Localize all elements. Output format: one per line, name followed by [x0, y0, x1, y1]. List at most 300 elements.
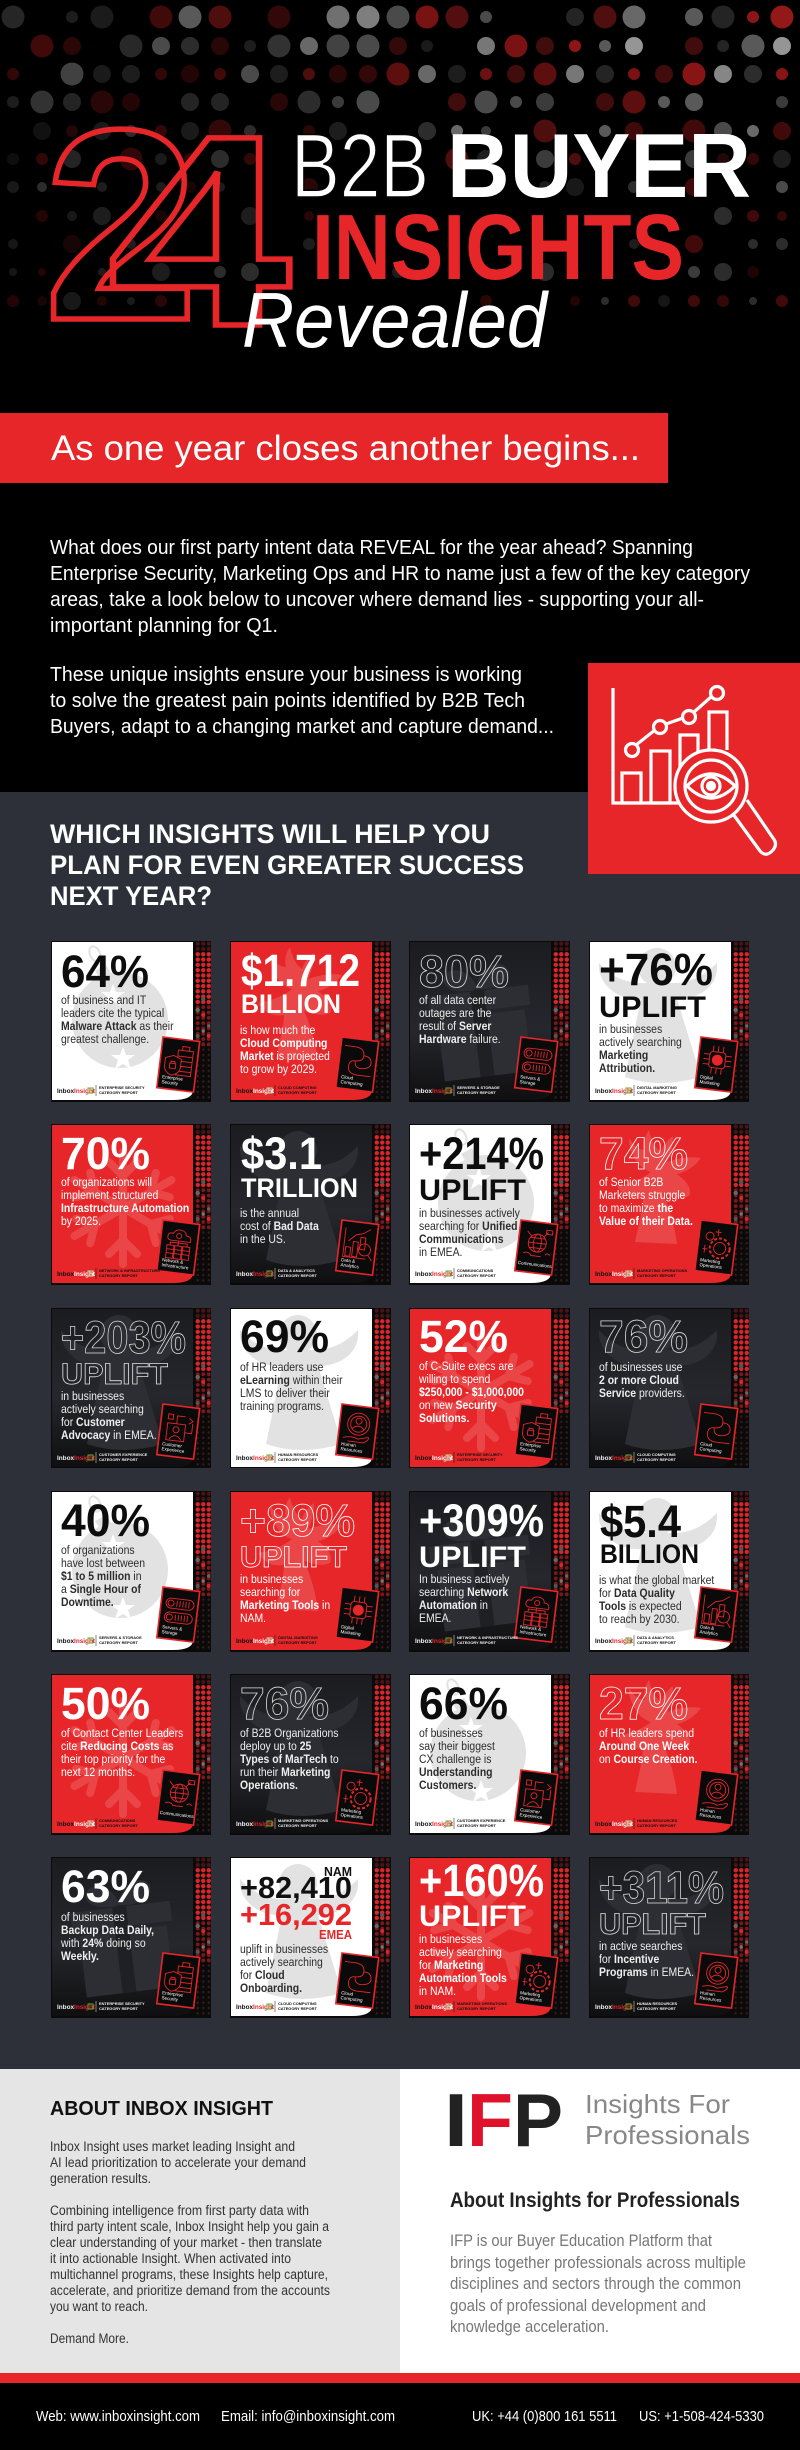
- body text: Downtime.: [61, 1596, 114, 1609]
- body text: Service: [599, 1387, 636, 1400]
- logo and category: CATEGORY REPORT: [99, 2006, 138, 2011]
- report cover: [515, 1770, 558, 1825]
- IFP logo: Insights For: [585, 2089, 730, 2119]
- logo and category: COMMUNICATIONS: [99, 1818, 136, 1823]
- report cover: Enterprise: [162, 1990, 184, 1998]
- body text: implement structured: [61, 1189, 158, 1202]
- logo and category: InboxInsight: [57, 1638, 96, 1645]
- body text: Infrastructure Automation: [61, 1202, 189, 1215]
- body text: Market: [240, 1050, 274, 1063]
- IFP text: goals of professional development and: [450, 2296, 706, 2315]
- logo and category: CATEGORY REPORT: [637, 1273, 676, 1278]
- report cover: [157, 1770, 200, 1825]
- IFP text: disciplines and sectors through the common: [450, 2274, 741, 2293]
- statistic: [241, 945, 360, 1019]
- statistic: BILLION: [600, 1539, 699, 1569]
- statistic: 69%: [240, 1311, 329, 1362]
- body text: on new: [419, 1399, 456, 1412]
- report cover: Resources: [699, 1812, 722, 1820]
- body text: In business actively: [419, 1573, 510, 1586]
- logo and category: CLOUD COMPUTING: [278, 2001, 317, 2006]
- watermark: bauble: [438, 1128, 534, 1252]
- statistic: [599, 944, 713, 1024]
- body text: in businesses actively: [419, 1207, 520, 1220]
- logo and category: [415, 1818, 506, 1829]
- report cover: Data &: [700, 1624, 714, 1631]
- logo and category: CATEGORY REPORT: [278, 1457, 317, 1462]
- logo and category: [595, 1268, 687, 1279]
- report cover: Infrastructure: [161, 1262, 189, 1270]
- report cover: Computing: [340, 1995, 363, 2003]
- body text: failure.: [467, 1033, 501, 1046]
- title numeral 24 outlined: 4: [108, 79, 293, 383]
- logo and category: [57, 1818, 138, 1829]
- intro text: [50, 537, 750, 738]
- body text: in businesses: [240, 1573, 303, 1586]
- body text: deploy up to: [240, 1740, 300, 1753]
- title: Revealed: [242, 276, 549, 364]
- body text: Programs: [599, 1966, 648, 1979]
- logo and category: COMMUNICATIONS: [457, 1268, 494, 1273]
- logo and category: CATEGORY REPORT: [457, 1273, 496, 1278]
- logo and category: InboxInsight: [57, 1088, 96, 1095]
- watermark: angel: [599, 1864, 717, 1999]
- body text: Security: [456, 1399, 497, 1412]
- report cover: Customer: [162, 1441, 183, 1449]
- logo and category: [57, 1635, 142, 1646]
- report cover: Customer: [520, 1807, 541, 1815]
- body text: for: [599, 1953, 614, 1966]
- report cover: Storage: [519, 1079, 536, 1086]
- stat card: +309% uplift network automation: [409, 1491, 570, 1652]
- body text: their top priority for the: [61, 1753, 165, 1766]
- IFP logo: [444, 2078, 750, 2162]
- report cover: [515, 1037, 558, 1092]
- logo and category: MARKETING OPERATIONS: [278, 1818, 328, 1823]
- stat card: +311% uplift incentive programs: [589, 1857, 749, 2018]
- body text: searching for: [240, 1586, 300, 1599]
- body text: leaders cite the typical: [61, 1007, 164, 1020]
- statistic: 70%: [61, 1128, 150, 1179]
- report cover: [336, 1770, 379, 1825]
- watermark: angel: [240, 1864, 358, 1999]
- report cover: Experience: [519, 1812, 543, 1820]
- report cover: Analytics: [699, 1629, 719, 1636]
- report cover: [336, 1953, 379, 2008]
- logo and category: CATEGORY REPORT: [637, 2006, 676, 2011]
- IFP logo: P: [513, 2078, 563, 2162]
- about text: Demand More.: [50, 2331, 129, 2346]
- about text: generation results.: [50, 2171, 151, 2186]
- title: [44, 73, 751, 383]
- body text: in: [131, 1570, 142, 1583]
- statistic: [61, 1312, 186, 1391]
- report cover: Marketing: [341, 1807, 362, 1815]
- body text: for: [599, 1587, 614, 1600]
- watermark: angel: [240, 1315, 358, 1450]
- body text: Around One Week: [599, 1740, 690, 1753]
- statistic: UPLIFT: [419, 1174, 526, 1207]
- body text: Customer: [76, 1416, 125, 1429]
- logo and category: SERVERS & STORAGE: [99, 1635, 142, 1640]
- body text: Solutions.: [419, 1412, 469, 1425]
- IFP text: IFP is our Buyer Education Platform that: [450, 2231, 712, 2250]
- report cover: Operations: [699, 1262, 723, 1270]
- logo and category: InboxInsight: [57, 2004, 96, 2011]
- heading: about IFP: About Insights for Professionals: [450, 2189, 740, 2212]
- body text: outages are the: [419, 1007, 491, 1020]
- logo and category: InboxInsight: [595, 1271, 634, 1278]
- statistic: +203%: [61, 1312, 186, 1363]
- logo and category: CLOUD COMPUTING: [278, 1085, 317, 1090]
- statistic: [419, 1495, 544, 1574]
- body text: CX challenge is: [419, 1753, 492, 1766]
- intro text: These unique insights ensure your business is working: [50, 664, 522, 686]
- body text: is how much the: [240, 1024, 315, 1037]
- report cover: [695, 1220, 738, 1275]
- report cover: Enterprise: [162, 1074, 184, 1082]
- title numeral 24 outlined: 2: [44, 73, 198, 377]
- background: slate insights section: [0, 792, 800, 2069]
- stat card: 63% backup data: [51, 1857, 211, 2018]
- logo and category: [236, 1452, 319, 1463]
- statistic: 50%: [61, 1678, 150, 1729]
- watermark: angel: [240, 1131, 358, 1266]
- body text: eLearning: [240, 1374, 290, 1387]
- report cover: Storage: [161, 1629, 178, 1636]
- background: black header: [0, 0, 800, 792]
- body text: in: [319, 1599, 330, 1612]
- body text: Marketing: [281, 1766, 330, 1779]
- watermark: angel: [599, 948, 717, 1083]
- logo and category: [415, 1635, 518, 1646]
- statistic: UPLIFT: [599, 991, 706, 1024]
- logo and category: InboxInsight: [57, 1271, 96, 1278]
- body text: of businesses use: [599, 1361, 682, 1374]
- logo and category: [595, 1818, 678, 1829]
- body text: of C-Suite execs are: [419, 1360, 513, 1373]
- body text: Cloud: [255, 1969, 285, 1982]
- stat card: +76% uplift marketing attribution: [589, 941, 749, 1102]
- logo and category: InboxInsight: [595, 1088, 634, 1095]
- body text: 24% doing so: [82, 1937, 146, 1950]
- logo and category: CATEGORY REPORT: [637, 1457, 676, 1462]
- body text: Backup Data Daily,: [61, 1924, 154, 1937]
- report cover: Marketing: [340, 1629, 361, 1637]
- intro text: What does our first party intent data REVEAL for the year ahead? Spanning: [50, 537, 693, 559]
- IFP logo: Professionals: [585, 2120, 750, 2150]
- report cover: Resources: [699, 1995, 722, 2003]
- statistic: EMEA: [319, 1927, 353, 1942]
- logo and category: [415, 1085, 500, 1096]
- logo and category: CATEGORY REPORT: [457, 2006, 496, 2011]
- report cover: [515, 1953, 558, 2008]
- watermark: snowflake: [426, 1336, 536, 1448]
- logo and category: [595, 2001, 678, 2012]
- logo and category: [415, 2001, 507, 2012]
- report cover: Cloud: [341, 1990, 354, 1997]
- watermark: reindeer: [617, 1680, 701, 1794]
- report cover: [157, 1404, 200, 1459]
- body text: 25: [300, 1740, 311, 1753]
- watermark: snowflake: [68, 1702, 178, 1814]
- logo and category: [57, 1085, 145, 1096]
- logo and category: CATEGORY REPORT: [457, 1457, 496, 1462]
- body text: Understanding: [419, 1766, 493, 1779]
- statistic: UPLIFT: [599, 1908, 706, 1941]
- body text: for: [419, 1959, 434, 1972]
- report cover: Computing: [340, 1079, 363, 1087]
- logo and category: InboxInsight: [57, 1821, 96, 1828]
- logo and category: InboxInsight: [415, 1455, 454, 1462]
- footer bar: UK: +44 (0)800 161 5511: [472, 2408, 617, 2425]
- body text: next 12 months.: [61, 1766, 135, 1779]
- body text: $250,000 - $1,000,000: [419, 1386, 524, 1399]
- intro text: Buyers, adapt to a changing market and capture demand...: [50, 716, 554, 738]
- report cover: Cloud: [700, 1441, 713, 1448]
- body text: of HR leaders spend: [599, 1727, 694, 1740]
- stat card: 27% course creation: [589, 1674, 749, 1835]
- logo and category: [236, 1818, 328, 1829]
- logo and category: InboxInsight: [595, 1821, 634, 1828]
- about text: Inbox Insight uses market leading Insight and: [50, 2139, 295, 2154]
- report cover: Digital: [700, 1074, 713, 1081]
- body text: with: [60, 1937, 82, 1950]
- statistic: +76%: [599, 944, 713, 995]
- logo and category: [236, 1268, 317, 1279]
- logo and category: CATEGORY REPORT: [637, 1823, 676, 1828]
- report cover: Security: [161, 1079, 179, 1086]
- report cover: [336, 1587, 379, 1642]
- logo and category: CATEGORY REPORT: [99, 1823, 138, 1828]
- logo and category: InboxInsight: [236, 1455, 275, 1462]
- logo and category: [236, 1635, 318, 1646]
- report cover: Marketing: [520, 1990, 541, 1998]
- logo and category: HUMAN RESOURCES: [278, 1452, 319, 1457]
- statistic: +82,410: [240, 1870, 352, 1905]
- report cover: Computing: [699, 1446, 722, 1454]
- statistic: [240, 1864, 353, 1942]
- logo and category: [415, 1268, 496, 1279]
- logo and category: CATEGORY REPORT: [637, 1090, 676, 1095]
- body text: Communications: [419, 1233, 504, 1246]
- body text: Hardware: [419, 1033, 467, 1046]
- report cover: Enterprise: [520, 1441, 542, 1449]
- body text: Operations.: [240, 1779, 298, 1792]
- report cover: [515, 1220, 558, 1275]
- watermark: gift: [426, 1511, 538, 1632]
- logo and category: InboxInsight: [415, 1271, 454, 1278]
- watermark: bauble: [430, 1678, 526, 1802]
- report cover: Data &: [341, 1257, 355, 1264]
- body text: Automation: [419, 1599, 477, 1612]
- body text: Automation Tools: [419, 1972, 507, 1985]
- logo and category: [595, 1085, 677, 1096]
- body text: of all data center: [419, 994, 496, 1007]
- watermark: angel: [61, 1315, 179, 1450]
- body text: providers.: [636, 1387, 685, 1400]
- stat card: 80% server hardware: [409, 941, 570, 1102]
- watermark: angel: [599, 1498, 717, 1633]
- report cover: [157, 1587, 200, 1642]
- watermark: angel: [240, 1681, 358, 1816]
- stat card: +214% uplift unified communications: [409, 1124, 570, 1285]
- logo and category: [236, 1085, 317, 1096]
- report cover: [515, 1404, 558, 1459]
- watermark: angel: [599, 1315, 717, 1450]
- body text: in EMEA.: [110, 1429, 157, 1442]
- logo and category: ENTERPRISE SECURITY: [457, 1452, 503, 1457]
- statistic: 40%: [61, 1495, 150, 1546]
- statistic: UPLIFT: [419, 1900, 526, 1933]
- body text: Reducing Costs as: [80, 1740, 173, 1753]
- watermark: snowflake: [68, 1152, 178, 1264]
- logo and category: CATEGORY REPORT: [99, 1640, 138, 1645]
- body text: of organizations will: [61, 1176, 152, 1189]
- logo and category: CATEGORY REPORT: [278, 1823, 317, 1828]
- body text: of businesses: [419, 1727, 483, 1740]
- logo and category: CUSTOMER EXPERIENCE: [99, 1452, 148, 1457]
- about text: multichannel programs, these Insights help capture,: [50, 2267, 328, 2282]
- logo and category: SERVERS & STORAGE: [457, 1085, 500, 1090]
- logo and category: HUMAN RESOURCES: [637, 2001, 678, 2006]
- body text: Marketing: [599, 1049, 648, 1062]
- body text: Cloud Computing: [240, 1037, 327, 1050]
- body text: Types of MarTech: [240, 1753, 327, 1766]
- stat card: 69% eLearning: [230, 1308, 391, 1468]
- report cover: Communications: [160, 1810, 195, 1819]
- report cover: Security: [161, 1995, 179, 2002]
- statistic: NAM: [324, 1864, 352, 1879]
- logo and category: InboxInsight: [236, 1821, 275, 1828]
- body text: in: [477, 1599, 488, 1612]
- body text: to reach by 2030.: [599, 1613, 680, 1626]
- red banner: [0, 413, 668, 483]
- intro text: areas, take a look below to uncover where demand lies - supporting your all-: [50, 589, 704, 611]
- about text: third party intent scale, Inbox Insight help you gain a: [50, 2219, 329, 2234]
- section heading: WHICH INSIGHTS WILL HELP YOU: [50, 819, 490, 849]
- stat card: +89% uplift marketing tools: [230, 1491, 391, 1652]
- statistic: +89%: [240, 1495, 355, 1546]
- body text: for: [61, 1416, 76, 1429]
- report cover: Human: [700, 1807, 716, 1814]
- report cover: Marketing: [699, 1079, 720, 1087]
- IFP logo: F: [467, 2078, 513, 2162]
- body text: cite: [61, 1740, 80, 1753]
- body text: in businesses: [419, 1933, 482, 1946]
- logo and category: CATEGORY REPORT: [99, 1273, 138, 1278]
- body text: in NAM.: [419, 1985, 456, 1998]
- body text: by 2025.: [61, 1215, 101, 1228]
- about text: it into actionable Insight. When activated into: [50, 2251, 291, 2266]
- logo and category: InboxInsight: [595, 2004, 634, 2011]
- stat card: +160% uplift marketing automation: [409, 1855, 570, 2018]
- statistic: UPLIFT: [240, 1541, 347, 1574]
- report cover: Servers &: [520, 1074, 540, 1082]
- statistic: [600, 1496, 699, 1569]
- body text: a: [61, 1583, 70, 1596]
- logo and category: InboxInsight: [595, 1638, 634, 1645]
- stat card: 64% malware attack: [51, 941, 211, 1102]
- body text: Unified: [482, 1220, 518, 1233]
- intro text: to solve the greatest pain points identified by B2B Tech: [50, 690, 525, 712]
- logo and category: [236, 2001, 317, 2012]
- logo and category: InboxInsight: [57, 1455, 96, 1462]
- statistic: $1.712: [241, 945, 360, 996]
- stat card: $3.1 trillion bad data: [230, 1124, 391, 1285]
- body text: LMS to deliver their: [240, 1387, 330, 1400]
- body text: greatest challenge.: [61, 1033, 149, 1046]
- logo and category: CUSTOMER EXPERIENCE: [457, 1818, 506, 1823]
- statistic: TRILLION: [241, 1173, 358, 1203]
- watermark: reindeer: [617, 1130, 701, 1244]
- watermark: reindeer: [258, 1497, 342, 1611]
- about text: AI lead prioritization to accelerate your demand: [50, 2155, 306, 2170]
- body text: EMEA.: [419, 1612, 451, 1625]
- body text: is projected: [274, 1050, 330, 1063]
- body text: 2 or more Cloud: [599, 1374, 679, 1387]
- statistic: UPLIFT: [419, 1541, 526, 1574]
- body text: willing to spend: [418, 1373, 490, 1386]
- report cover: Operations: [519, 1995, 543, 2003]
- body text: within their: [290, 1374, 343, 1387]
- report cover: [336, 1404, 379, 1459]
- report cover: [157, 1953, 200, 2008]
- footer bar: Web: www.inboxinsight.com: [36, 2408, 200, 2425]
- stat card: +203% uplift customer advocacy: [51, 1308, 211, 1468]
- stat card: 50% contact center: [51, 1674, 211, 1835]
- report cover: Digital: [341, 1624, 354, 1631]
- body text: in EMEA.: [648, 1966, 694, 1979]
- body text: the: [658, 1202, 673, 1215]
- body text: in EMEA.: [419, 1246, 462, 1259]
- title: B2B: [291, 116, 429, 217]
- statistic: 27%: [599, 1678, 688, 1729]
- stat card: 66% understanding customers: [409, 1674, 570, 1835]
- statistic: $5.4: [600, 1496, 681, 1547]
- statistic: [419, 1128, 544, 1207]
- body text: Tools: [599, 1600, 626, 1613]
- body text: actively searching: [61, 1403, 144, 1416]
- logo and category: MARKETING OPERATIONS: [637, 1268, 687, 1273]
- IFP text: brings together professionals across multiple: [450, 2253, 746, 2272]
- logo and category: DATA & ANALYTICS: [637, 1635, 674, 1640]
- report cover: Experience: [161, 1446, 185, 1454]
- statistic: 76%: [240, 1678, 329, 1729]
- statistic: 74%: [599, 1128, 688, 1179]
- logo and category: CATEGORY REPORT: [278, 1273, 317, 1278]
- report cover: [336, 1220, 379, 1275]
- statistic: 52%: [419, 1311, 508, 1362]
- body text: of Contact Center Leaders: [61, 1727, 184, 1740]
- logo and category: InboxInsight: [415, 1088, 454, 1095]
- report cover: [695, 1587, 738, 1642]
- panel: about IFP: [400, 2069, 800, 2373]
- about text: clear understanding of your market - then translate: [50, 2235, 322, 2250]
- IFP logo: I: [444, 2078, 468, 2162]
- dot matrix header pattern: [2, 6, 794, 310]
- logo and category: InboxInsight: [236, 1088, 275, 1095]
- statistic: 66%: [419, 1678, 508, 1729]
- logo and category: DIGITAL MARKETING: [637, 1085, 677, 1090]
- logo and category: InboxInsight: [236, 2004, 275, 2011]
- report cover: [695, 1404, 738, 1459]
- title: INSIGHTS: [312, 195, 684, 299]
- report cover: Infrastructure: [519, 1629, 547, 1637]
- logo and category: [57, 1452, 148, 1463]
- logo and category: CATEGORY REPORT: [99, 1090, 138, 1095]
- panel: about Inbox Insight: [0, 2069, 400, 2373]
